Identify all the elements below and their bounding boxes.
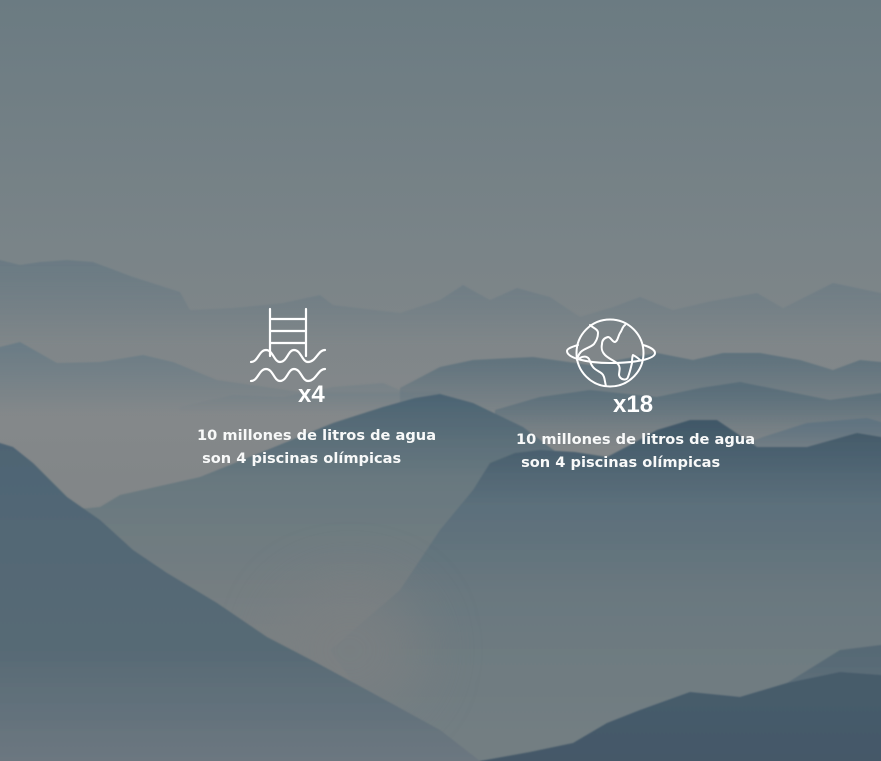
- icon: globe with ring: [566, 318, 656, 388]
- multiplier: x4: x4: [298, 381, 325, 408]
- caption: 10 millones de litros de agua son 4 piscinas olímpicas: [197, 427, 436, 467]
- group: pool comparison: [197, 308, 436, 467]
- haze over valley: [275, 580, 425, 720]
- group: globe comparison: [516, 318, 755, 471]
- caption: 10 millones de litros de agua son 4 piscinas olímpicas: [516, 431, 755, 471]
- icon: pool ladder and water waves: [250, 308, 326, 382]
- multiplier: x18: x18: [613, 391, 653, 418]
